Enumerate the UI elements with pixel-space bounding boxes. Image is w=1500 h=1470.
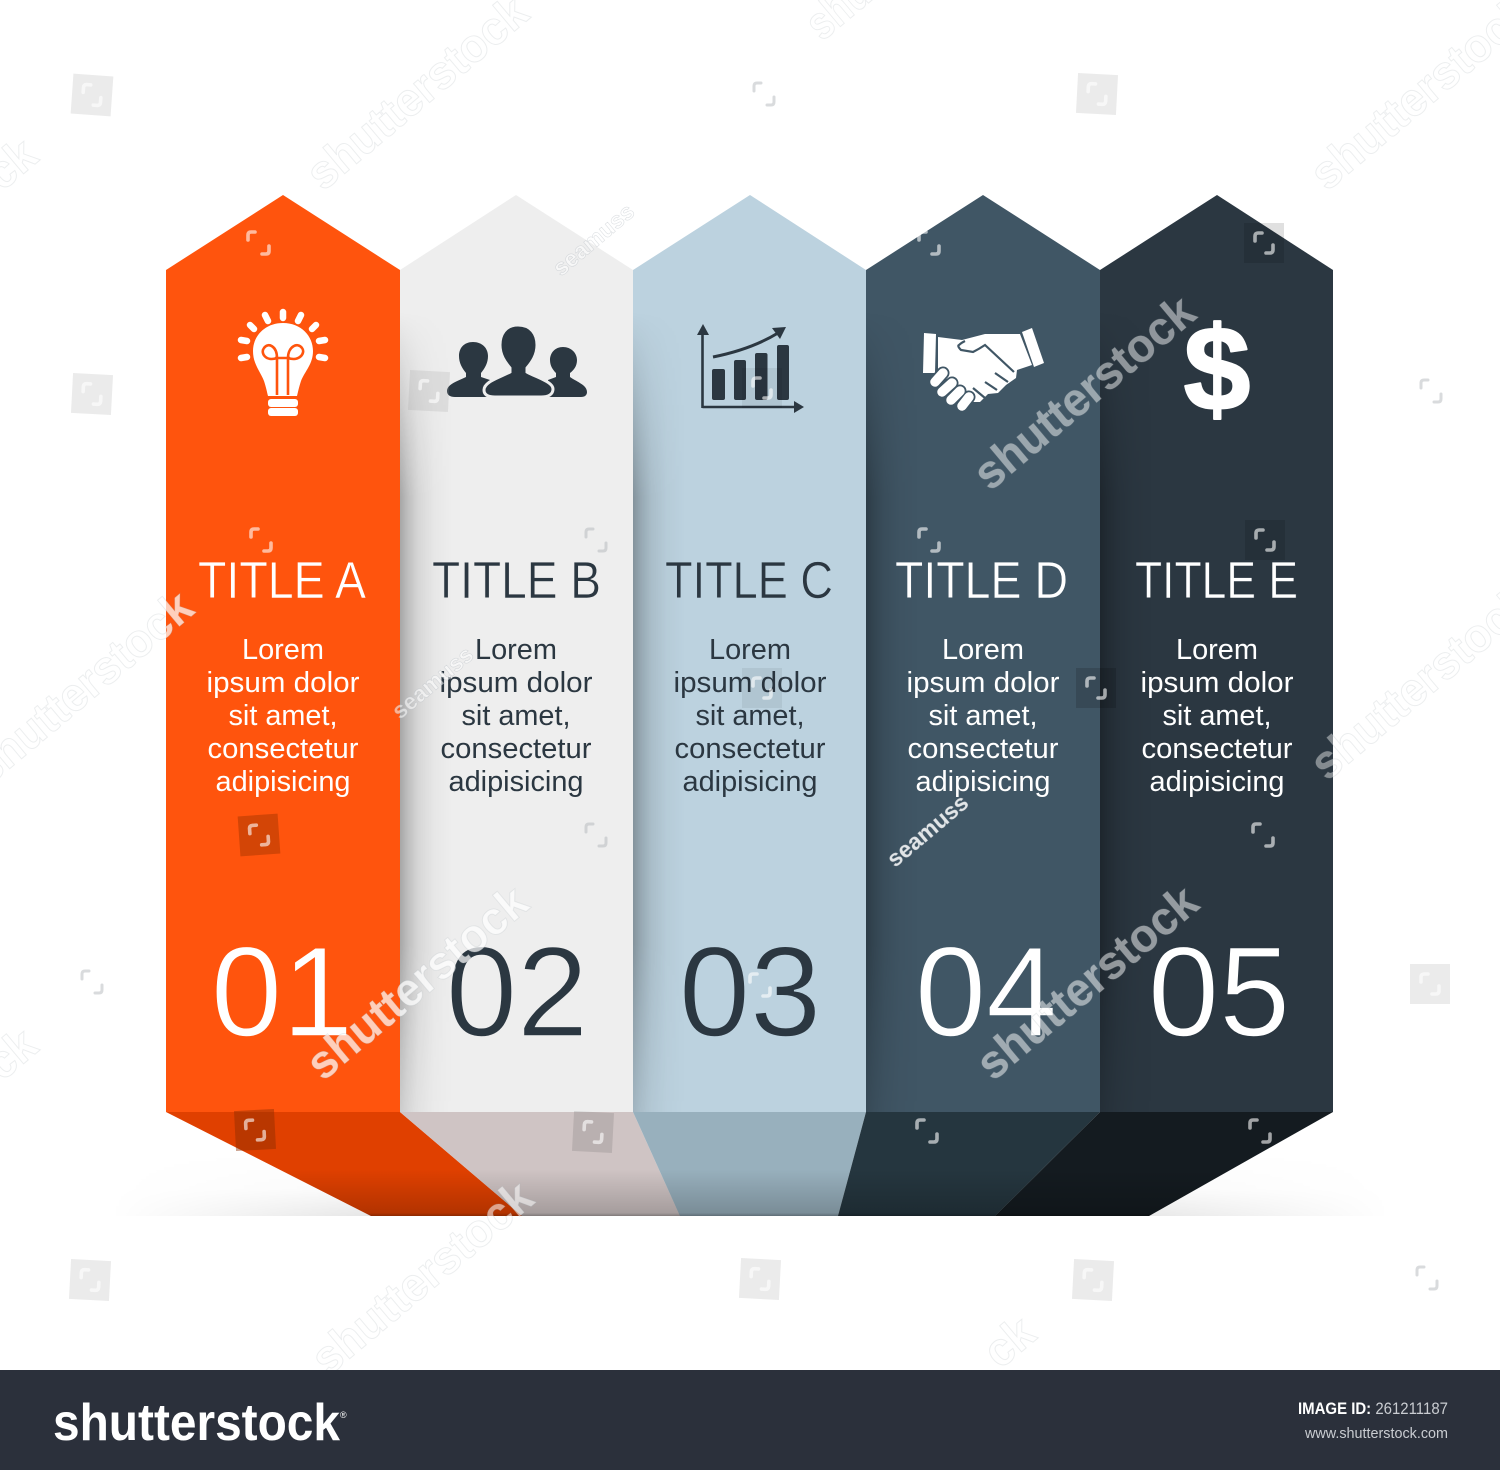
- footer url: www.shutterstock.com: [1304, 1426, 1448, 1442]
- text block: column 01: consectetur: [208, 733, 359, 765]
- icon: dollar sign: $: [1184, 302, 1250, 436]
- text block: column 02: adipisicing: [448, 766, 584, 798]
- icon: growth chart: [697, 324, 804, 413]
- text block: column 05: adipisicing: [1150, 766, 1284, 798]
- title: C: TITLE C: [665, 552, 833, 610]
- number 02: 02: [446, 921, 588, 1064]
- text block: column 05: consectetur: [1142, 733, 1293, 765]
- watermark unboxed marks: [82, 83, 1441, 1289]
- text block: column 02: [440, 634, 593, 798]
- text block: column 04: sit amet,: [928, 700, 1038, 732]
- number 05: 05: [1148, 921, 1290, 1064]
- title: D: TITLE D: [895, 552, 1068, 610]
- watermark overlays: shutterstock: [300, 1169, 543, 1385]
- watermark boxed marks: [69, 73, 1450, 1301]
- text block: column 03: [674, 634, 827, 798]
- text block: column 01: adipisicing: [216, 766, 350, 798]
- text block: column 02: consectetur: [440, 733, 592, 765]
- panel: column 05 charcoal: [1100, 195, 1333, 1112]
- icon: handshake: [923, 328, 1044, 406]
- panel: column 04 slate: [866, 195, 1100, 1112]
- text block: column 04: [906, 634, 1060, 798]
- icon: light bulb: [241, 312, 325, 416]
- number 03: 03: [679, 921, 821, 1064]
- watermark overlays: ck: [972, 1304, 1045, 1378]
- text block: column 05: [1140, 634, 1294, 798]
- text block: column 03: sit amet,: [696, 700, 804, 732]
- number 04: 04: [915, 921, 1057, 1064]
- bottom facets of the columns: [166, 1112, 1333, 1216]
- text block: column 01: Lorem: [242, 634, 324, 666]
- title: B: TITLE B: [432, 552, 601, 610]
- panel: column 01 orange: [166, 195, 400, 1112]
- text block: column 01: ipsum dolor: [206, 667, 360, 699]
- footer registered mark: ®: [340, 1410, 347, 1420]
- number 01: 01: [211, 921, 353, 1064]
- text block: column 04: Lorem: [942, 634, 1024, 666]
- panel: column 02 light grey: [400, 195, 633, 1112]
- watermark overlays: shutterstock: [965, 874, 1208, 1090]
- text block: column 02: Lorem: [475, 634, 557, 666]
- text block: column 05: Lorem: [1176, 634, 1258, 666]
- watermark overlays: shutterstock: [962, 284, 1205, 500]
- title: A: TITLE A: [198, 552, 366, 610]
- watermark overlays: seamuss: [387, 641, 478, 724]
- text block: column 01: [206, 634, 360, 798]
- footer image id: IMAGE ID: 261211187: [1298, 1400, 1448, 1418]
- text block: column 02: sit amet,: [462, 700, 570, 732]
- title: E: TITLE E: [1135, 552, 1298, 610]
- column fold shadows: [400, 332, 1116, 1112]
- text block: column 05: sit amet,: [1162, 700, 1272, 732]
- text block: column 02: ipsum dolor: [440, 667, 593, 699]
- watermark overlays: seamuss: [882, 789, 973, 872]
- footer bar: [0, 1370, 1500, 1470]
- text block: column 04: adipisicing: [916, 766, 1050, 798]
- watermark overlays: seamuss: [548, 198, 639, 281]
- text block: column 03: consectetur: [674, 733, 826, 765]
- panel: column 03 pale blue: [633, 195, 866, 1112]
- text block: column 05: ipsum dolor: [1140, 667, 1294, 699]
- text block: column 03: Lorem: [709, 634, 791, 666]
- text block: column 04: consectetur: [908, 733, 1059, 765]
- icon: people group: [447, 325, 587, 397]
- footer logo: shutterstock: [53, 1394, 340, 1452]
- text block: column 01: sit amet,: [228, 700, 338, 732]
- watermark overlays: shutterstock: [295, 874, 538, 1090]
- ground shadow: [199, 1196, 1300, 1216]
- text block: column 04: ipsum dolor: [906, 667, 1060, 699]
- text block: column 03: ipsum dolor: [674, 667, 827, 699]
- text block: column 03: adipisicing: [682, 766, 818, 798]
